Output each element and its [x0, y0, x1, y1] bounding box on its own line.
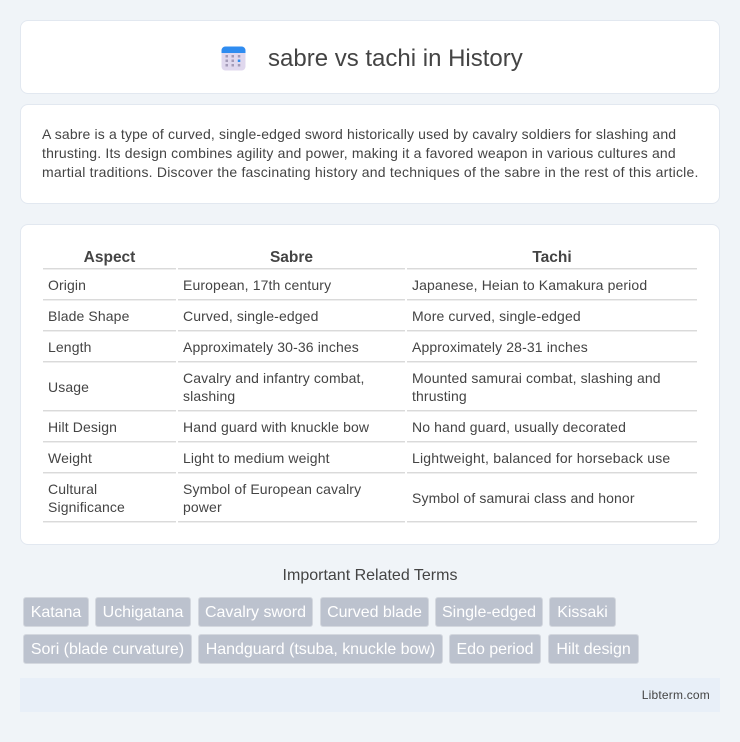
- tag: Katana: [23, 597, 89, 627]
- tag: Katana: Katana: [31, 604, 81, 621]
- row: cultural significance: Symbol of samurai class and honor: [412, 490, 635, 506]
- row: blade shape: Blade Shape: [48, 308, 130, 324]
- column headers: Sabre: [270, 249, 313, 266]
- footer bar: [20, 678, 720, 712]
- row: cultural significance: power: [183, 499, 222, 515]
- intro text panel: [20, 104, 720, 204]
- row: cultural significance: Significance: [48, 499, 125, 515]
- row: length: [48, 339, 588, 355]
- tag: Curved blade: Curved blade: [327, 604, 422, 621]
- column headers: Tachi: [532, 249, 572, 266]
- row: length: Length: [48, 339, 92, 355]
- row: cultural significance: [48, 481, 635, 515]
- intro paragraph: thrusting. Its design combines agility and power, making it a favored weapon in various cultures and: [42, 145, 676, 161]
- tag: Cavalry sword: [198, 597, 313, 627]
- tag: Cavalry sword: Cavalry sword: [205, 604, 306, 621]
- title: sabre vs tachi in History: [268, 45, 523, 72]
- tag: Handguard: [198, 634, 443, 664]
- tag: Edo period: [449, 634, 541, 664]
- tag: Edo period: Edo period: [456, 641, 534, 658]
- row: usage: Cavalry and infantry combat,: [183, 370, 365, 386]
- tag: Sori: Sori (blade curvature): [31, 641, 184, 658]
- icon: calendar: [222, 46, 246, 70]
- tag: Uchigatana: [95, 597, 191, 627]
- tag: Uchigatana: Uchigatana: [103, 604, 183, 621]
- header panel: [20, 20, 720, 94]
- row: usage: Usage: [48, 379, 89, 395]
- row: usage: Mounted samurai combat, slashing and: [412, 370, 661, 386]
- row: hilt design: [48, 419, 626, 435]
- row: blade shape: Curved, single-edged: [183, 308, 318, 324]
- row: cultural significance: Symbol of European cavalry: [183, 481, 361, 497]
- intro paragraph: [42, 126, 699, 180]
- row: origin: Japanese, Heian to Kamakura period: [412, 277, 647, 293]
- row: weight: [48, 450, 670, 466]
- row: hilt design: No hand guard, usually decorated: [412, 419, 626, 435]
- intro paragraph: martial traditions. Discover the fascinating history and techniques of the sabre in the rest of this article.: [42, 164, 699, 180]
- row: origin: European, 17th century: [183, 277, 331, 293]
- row: weight: Weight: [48, 450, 92, 466]
- row: usage: slashing: [183, 388, 235, 404]
- tag: Handguard: Handguard (tsuba, knuckle bow): [206, 641, 435, 658]
- column headers: [84, 249, 572, 266]
- row: origin: Origin: [48, 277, 86, 293]
- column headers: Aspect: [84, 249, 135, 266]
- row: weight: Light to medium weight: [183, 450, 330, 466]
- row: origin: [48, 277, 647, 293]
- tag: Kissaki: [549, 597, 616, 627]
- tag: Single-edged: [435, 597, 543, 627]
- row: length: Approximately 28-31 inches: [412, 339, 588, 355]
- row: hilt design: Hilt Design: [48, 419, 117, 435]
- related terms tags: [23, 597, 639, 664]
- footer credit: Libterm.com: [642, 688, 710, 702]
- panel: comparison table: [20, 224, 720, 545]
- tag: Curved blade: [320, 597, 429, 627]
- row: usage: [48, 370, 661, 404]
- row: hilt design: Hand guard with knuckle bow: [183, 419, 369, 435]
- tag: Sori: [23, 634, 192, 664]
- tag: Single-edged: Single-edged: [442, 604, 536, 621]
- row: cultural significance: Cultural: [48, 481, 97, 497]
- row: blade shape: [48, 308, 581, 324]
- row: weight: Lightweight, balanced for horseback use: [412, 450, 670, 466]
- row: usage: thrusting: [412, 388, 467, 404]
- row: length: Approximately 30-36 inches: [183, 339, 359, 355]
- tag: Kissaki: Kissaki: [557, 604, 608, 621]
- row: blade shape: More curved, single-edged: [412, 308, 581, 324]
- tag: Hilt design: Hilt design: [556, 641, 631, 658]
- intro paragraph: A sabre is a type of curved, single-edged sword historically used by cavalry soldiers for slashing and: [42, 126, 676, 142]
- related terms heading: Important Related Terms: [283, 567, 457, 584]
- tag: Hilt design: [548, 634, 639, 664]
